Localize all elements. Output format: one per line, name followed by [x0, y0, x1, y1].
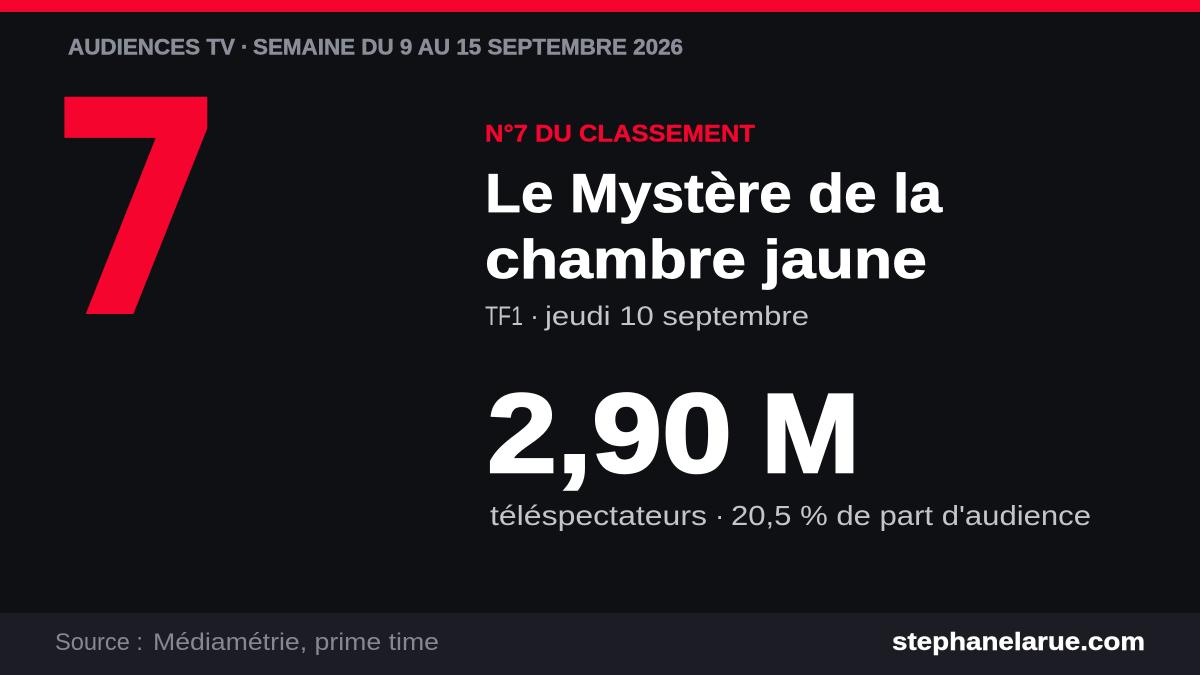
big rank number: 7	[47, 38, 228, 385]
source note	[55, 629, 439, 656]
rank label: N°7 DU CLASSEMENT	[485, 120, 755, 148]
source note: Source :	[55, 629, 143, 656]
footer band	[0, 613, 1200, 675]
audience details: ·	[715, 500, 724, 531]
programme title	[485, 162, 942, 290]
channel and date: jeudi 10 septembre	[544, 301, 809, 331]
audience figure: M	[761, 371, 860, 496]
source note: Médiamétrie, prime time	[153, 629, 439, 656]
audience details: téléspectateurs	[490, 500, 707, 531]
programme title: Le Mystère de la	[485, 162, 942, 224]
header label: SEMAINE DU 9 AU 15 SEPTEMBRE 2026	[253, 34, 683, 60]
channel and date: TF1	[485, 301, 523, 331]
header label: AUDIENCES TV	[68, 34, 235, 60]
programme title: chambre jaune	[485, 228, 927, 290]
channel and date: ·	[530, 301, 539, 331]
audience details	[490, 500, 1091, 531]
header label	[68, 34, 683, 60]
site name: stephanelarue.com	[892, 628, 1145, 656]
audience figure	[487, 371, 860, 496]
audience details: 20,5 % de part d'audience	[731, 500, 1091, 531]
top red bar	[0, 0, 1200, 12]
audience figure: 2,90	[487, 371, 732, 496]
header label: ·	[241, 34, 248, 60]
